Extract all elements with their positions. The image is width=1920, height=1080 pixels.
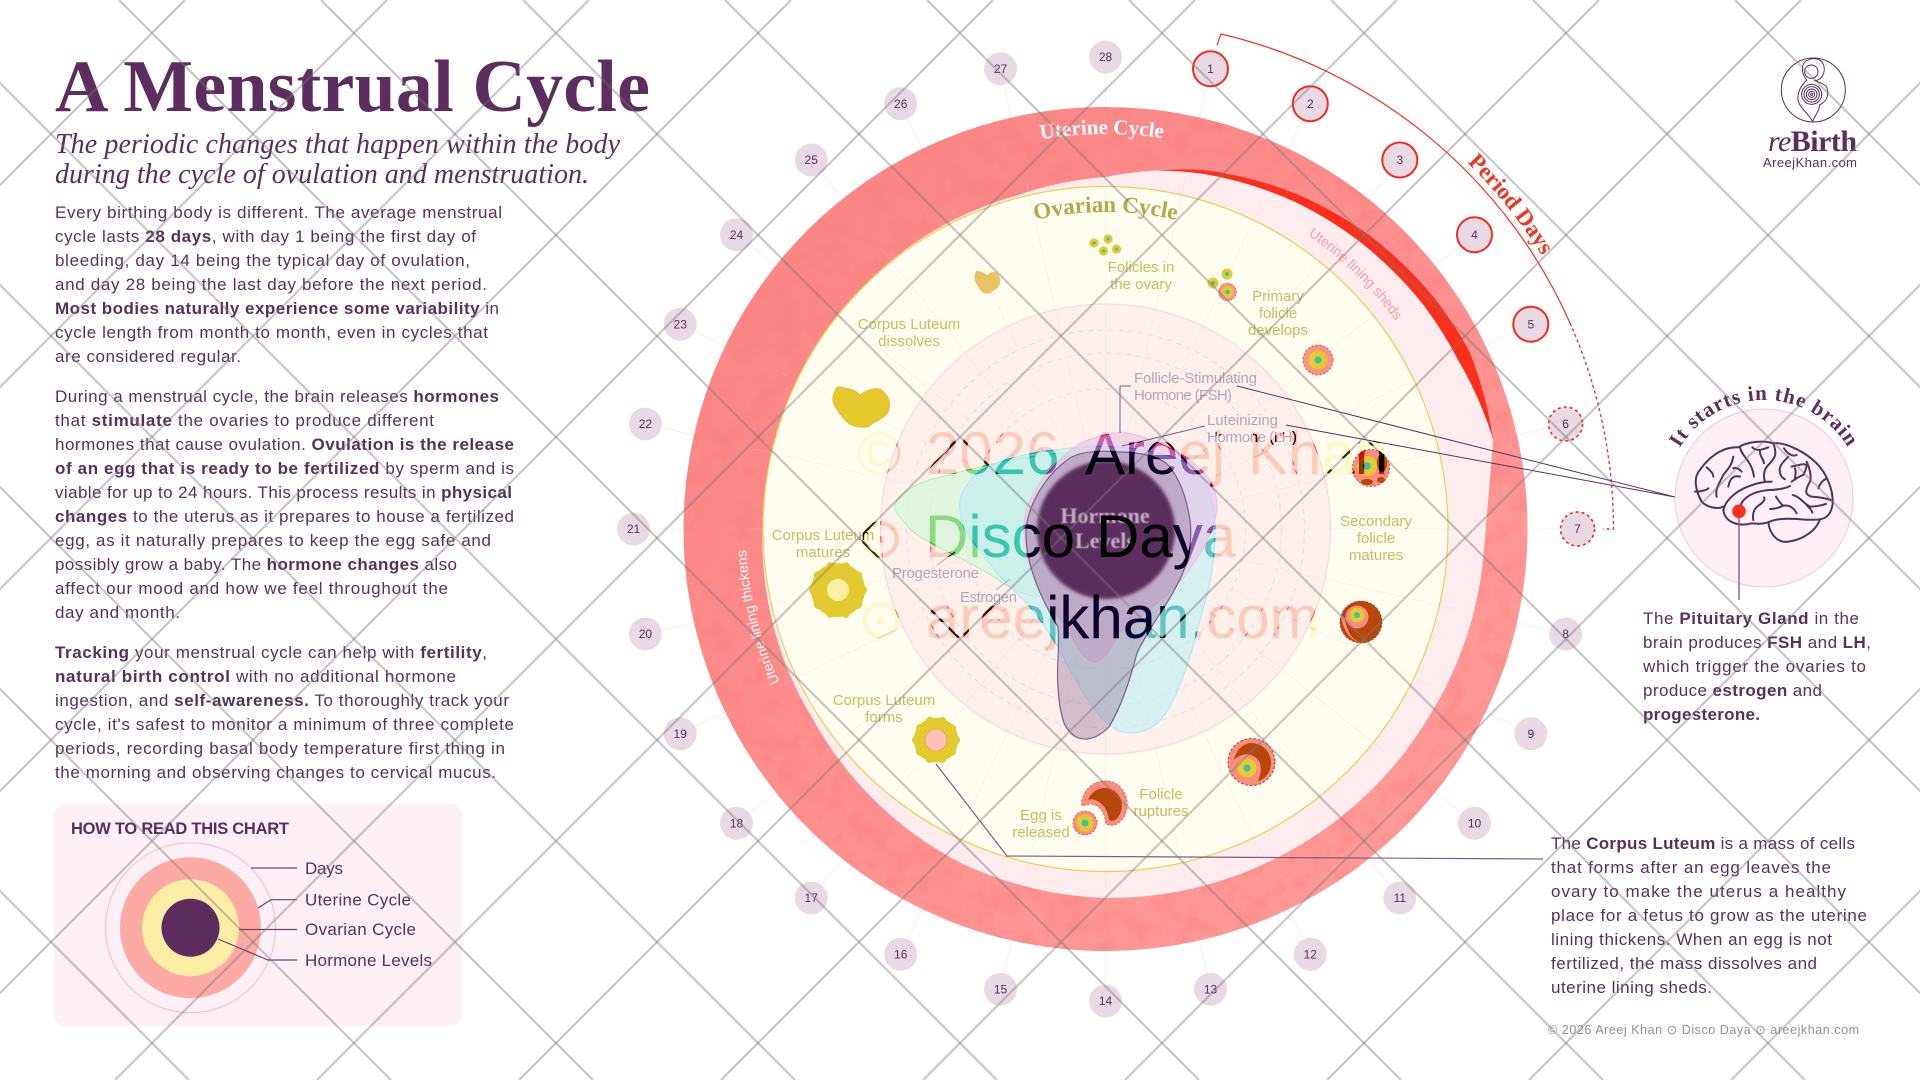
legend labels: Uterine Cycle [305, 890, 411, 910]
day markers: 13 [1204, 982, 1217, 996]
icon: mature follicle [1228, 738, 1275, 786]
day markers: 20 [639, 627, 652, 641]
text block: corpus luteum: ovary to make the uterus a healthy [1551, 882, 1846, 901]
icon: follicles in the ovary [1089, 234, 1121, 256]
ovary stage labels: the ovary [1110, 276, 1172, 293]
connector lines [936, 386, 1675, 859]
text block: pituitary gland: The Pituitary Gland in the [1643, 609, 1859, 628]
icon: maturing follicle [1340, 601, 1382, 643]
period days label: Period Days [1468, 152, 1550, 254]
day markers: 25 [805, 153, 818, 167]
day markers: 17 [805, 891, 818, 905]
uterine lining [762, 169, 1493, 898]
icon: corpus luteum dissolves large [833, 387, 890, 427]
period days bracket arc [1217, 34, 1614, 529]
ovary stage labels: Corpus Luteum [772, 527, 874, 544]
footer copyright: © 2026 Areej Khan ⊙ Disco Daya ⊙ areejkhan.com [1548, 1023, 1859, 1037]
hormone labels [892, 370, 1297, 606]
text block: hormones paragraph: possibly grow a baby. The hormone changes also [55, 555, 457, 574]
icon: corpus luteum forms [914, 718, 958, 762]
text block: hormones paragraph: affect our mood and how we feel throughout the [55, 579, 448, 598]
watermark: Disco [925, 503, 1075, 570]
day markers: 3 [1396, 153, 1403, 167]
uterine ring [684, 107, 1528, 951]
icon: follicle ruptures [1082, 781, 1127, 825]
legend labels: Days [305, 859, 343, 878]
chart: menstrual cycle wheel [650, 74, 1560, 984]
panel: it starts in the brain [1668, 386, 1854, 600]
title: A Menstrual Cycle [55, 46, 650, 128]
text block: pituitary gland: which trigger the ovaries to [1642, 657, 1866, 676]
hormone levels label: Hormone [1060, 503, 1150, 528]
text block: corpus luteum: The Corpus Luteum is a mass of cells [1551, 834, 1855, 853]
text block: corpus luteum: that forms after an egg leaves the [1551, 858, 1831, 877]
text block: corpus luteum: fertilized, the mass dissolves and [1551, 954, 1817, 973]
day markers: 1 [1207, 62, 1214, 76]
subtitle [55, 129, 621, 190]
hormone labels: Hormone (FSH) [1134, 387, 1232, 404]
day markers: 10 [1468, 816, 1481, 830]
text block: hormones paragraph: hormones that cause ovulation. Ovulation is the release [55, 435, 514, 454]
panel: how to read this chart [54, 804, 462, 1026]
hormone levels label: Levels [1075, 528, 1135, 553]
day markers: 9 [1527, 727, 1534, 741]
text block: hormones paragraph: of an egg that is ready to be fertilized by sperm and is [55, 459, 514, 478]
text block: tracking paragraph: Tracking your menstrual cycle can help with fertility, [55, 643, 487, 662]
brain heading: It starts in the brain [1668, 386, 1854, 448]
hormone labels: Estrogen [960, 589, 1017, 606]
ovary stage labels: Folicles in [1108, 259, 1174, 276]
text block: hormones paragraph: viable for up to 24 hours. This process results in physical [55, 483, 512, 502]
icon: pituitary gland dot [1732, 504, 1746, 518]
day markers: 27 [994, 62, 1007, 76]
day markers: 6 [1562, 417, 1569, 431]
ovary stage labels: Primary [1252, 288, 1304, 305]
legend heading: HOW TO READ THIS CHART [71, 820, 289, 838]
icon: egg released [1073, 811, 1097, 835]
text block: tracking paragraph: natural birth control with no additional hormone [55, 667, 456, 686]
day markers: 22 [639, 417, 652, 431]
legend labels: Hormone Levels [305, 951, 432, 970]
ovary stage labels: released [1012, 824, 1070, 841]
text block: pituitary gland: produce estrogen and [1643, 681, 1822, 700]
watermark [857, 420, 1388, 652]
blob: follicle-stimulating hormone [1026, 451, 1191, 739]
day markers: 15 [994, 982, 1007, 996]
text block: tracking paragraph [55, 643, 514, 782]
text block: tracking paragraph: periods, recording basal body temperature first thing in [55, 739, 505, 758]
uterine lining thickens label: Uterine lining thickens [738, 550, 778, 686]
pituitary pointer line [1738, 512, 1740, 600]
ovary stage labels: ruptures [1133, 803, 1189, 820]
day markers: 21 [627, 522, 640, 536]
icon: secondary follicle [1352, 450, 1390, 486]
day markers: 28 [1099, 50, 1112, 64]
text block: intro paragraph: are considered regular. [55, 347, 241, 366]
ovary stage labels: folicle [1259, 305, 1297, 322]
ovary stage labels: matures [1349, 547, 1403, 564]
ovary stage labels: matures [796, 544, 850, 561]
text block: hormones paragraph: During a menstrual cycle, the brain releases hormones [55, 387, 499, 406]
text block: hormones paragraph [55, 387, 514, 622]
day markers [617, 40, 1594, 1018]
day markers: 16 [894, 948, 908, 962]
hormone disc [880, 304, 1330, 754]
text block: pituitary gland: brain produces FSH and LH, [1643, 633, 1871, 652]
ovary stage labels: dissolves [878, 333, 940, 350]
day markers: 24 [730, 228, 743, 242]
text block: tracking paragraph: ingestion, and self-awareness. To thoroughly track your [55, 691, 509, 710]
text block: intro paragraph: bleeding, day 14 being the typical day of ovulation, [55, 251, 470, 270]
text block: hormones paragraph: day and month. [55, 603, 180, 622]
uterine lining sheds label: Uterine lining sheds [1310, 228, 1400, 320]
ovarian cycle curved label: Ovarian Cycle [1034, 196, 1177, 220]
red shedding crescent [1156, 169, 1493, 440]
icon: corpus luteum matures [811, 563, 865, 617]
text block: corpus luteum: place for a fetus to grow as the uterine [1551, 906, 1867, 925]
watermark: Daya [1096, 503, 1237, 570]
text block: corpus luteum: uterine lining sheds. [1551, 978, 1712, 997]
watermark: ⊙ [857, 587, 904, 652]
icon: primary follicle [1303, 345, 1333, 375]
icon: corpus luteum dissolves small [974, 271, 1000, 293]
day markers: 4 [1471, 228, 1478, 242]
hormone labels: Hormone (LH) [1207, 429, 1297, 446]
day markers: 8 [1562, 627, 1569, 641]
hormone labels: Progesterone [892, 565, 979, 582]
text block: pituitary gland: progesterone. [1643, 705, 1760, 724]
day markers: 19 [674, 727, 687, 741]
text block: tracking paragraph: the morning and observing changes to cervical mucus. [55, 763, 496, 782]
ovary stage labels: Secondary [1340, 513, 1412, 530]
watermark: 2026 [926, 420, 1059, 487]
text block: corpus luteum: lining thickens. When an egg is not [1551, 930, 1832, 949]
text block: intro paragraph: and day 28 being the last day before the next period. [55, 275, 487, 294]
watermark: ⊙ [857, 506, 904, 571]
ovary stage labels: Corpus Luteum [858, 316, 960, 333]
brand name: reBirth [1768, 125, 1857, 158]
text block: corpus luteum [1551, 834, 1867, 997]
ovary stage labels: Folicle [1139, 786, 1183, 803]
watermark: Areej [1085, 420, 1225, 487]
ovarian cycle disc [763, 186, 1448, 872]
day markers: 18 [730, 816, 743, 830]
blob: estrogen [960, 446, 1215, 733]
ovary stage labels: forms [865, 709, 903, 726]
text block: hormones paragraph: changes to the uterus as it prepares to house a fertilized [55, 507, 514, 526]
hormone levels label [1060, 503, 1150, 553]
text block: hormones paragraph: that stimulate the ovaries to produce different [55, 411, 434, 430]
text block: hormones paragraph: egg, as it naturally prepares to keep the egg safe and [55, 531, 491, 550]
text block: intro paragraph: Every birthing body is different. The average menstrual [55, 203, 502, 222]
ovary stage labels [772, 259, 1412, 841]
ovary stage labels: develops [1248, 322, 1308, 339]
legend labels [305, 859, 432, 970]
legend labels: Ovarian Cycle [305, 920, 416, 939]
watermark: © [857, 420, 901, 487]
day markers: 26 [894, 97, 908, 111]
text block: intro paragraph: cycle length from month to month, even in cycles that [55, 323, 488, 342]
text block: intro paragraph: cycle lasts 28 days, with day 1 being the first day of [55, 227, 476, 246]
ovary stage labels: Egg is [1020, 807, 1062, 824]
watermark: areejkhan.com [926, 584, 1320, 651]
day markers: 2 [1307, 97, 1314, 111]
blob: progesterone [895, 452, 1100, 597]
day markers: 14 [1099, 994, 1112, 1008]
watermark: Khan [1248, 420, 1388, 487]
hormone centre circle [1037, 461, 1175, 599]
ovary stage labels: Corpus Luteum [833, 692, 935, 709]
brand url: AreejKhan.com [1763, 155, 1857, 170]
text block: pituitary gland [1642, 609, 1871, 724]
hormone labels: Follicle-Stimulating [1134, 370, 1257, 387]
icon: goddess emblem [1781, 58, 1845, 122]
text block: tracking paragraph: cycle, it's safest to monitor a minimum of three complete [55, 715, 514, 734]
legend diagram [106, 843, 297, 1013]
icon: brain [1695, 442, 1833, 542]
day markers: 12 [1304, 948, 1317, 962]
subtitle: The periodic changes that happen within the body [55, 129, 621, 160]
day markers: 11 [1394, 891, 1406, 905]
text block: intro paragraph: Most bodies naturally experience some variability in [55, 299, 499, 318]
hormone pointer lines [937, 386, 1205, 590]
ovary stage labels: folicle [1357, 530, 1395, 547]
icon: early primary follicles [1208, 268, 1236, 301]
uterine cycle curved label: Uterine Cycle [1039, 120, 1164, 140]
logo: reBirth [1763, 58, 1857, 170]
blob: luteinizing hormone [1024, 432, 1217, 662]
day markers: 23 [674, 318, 687, 332]
subtitle: during the cycle of ovulation and menstruation. [55, 159, 589, 190]
hormone labels: Luteinizing [1207, 412, 1278, 429]
day markers: 7 [1574, 522, 1581, 536]
text block: intro paragraph [55, 203, 502, 366]
day markers: 5 [1527, 318, 1534, 332]
